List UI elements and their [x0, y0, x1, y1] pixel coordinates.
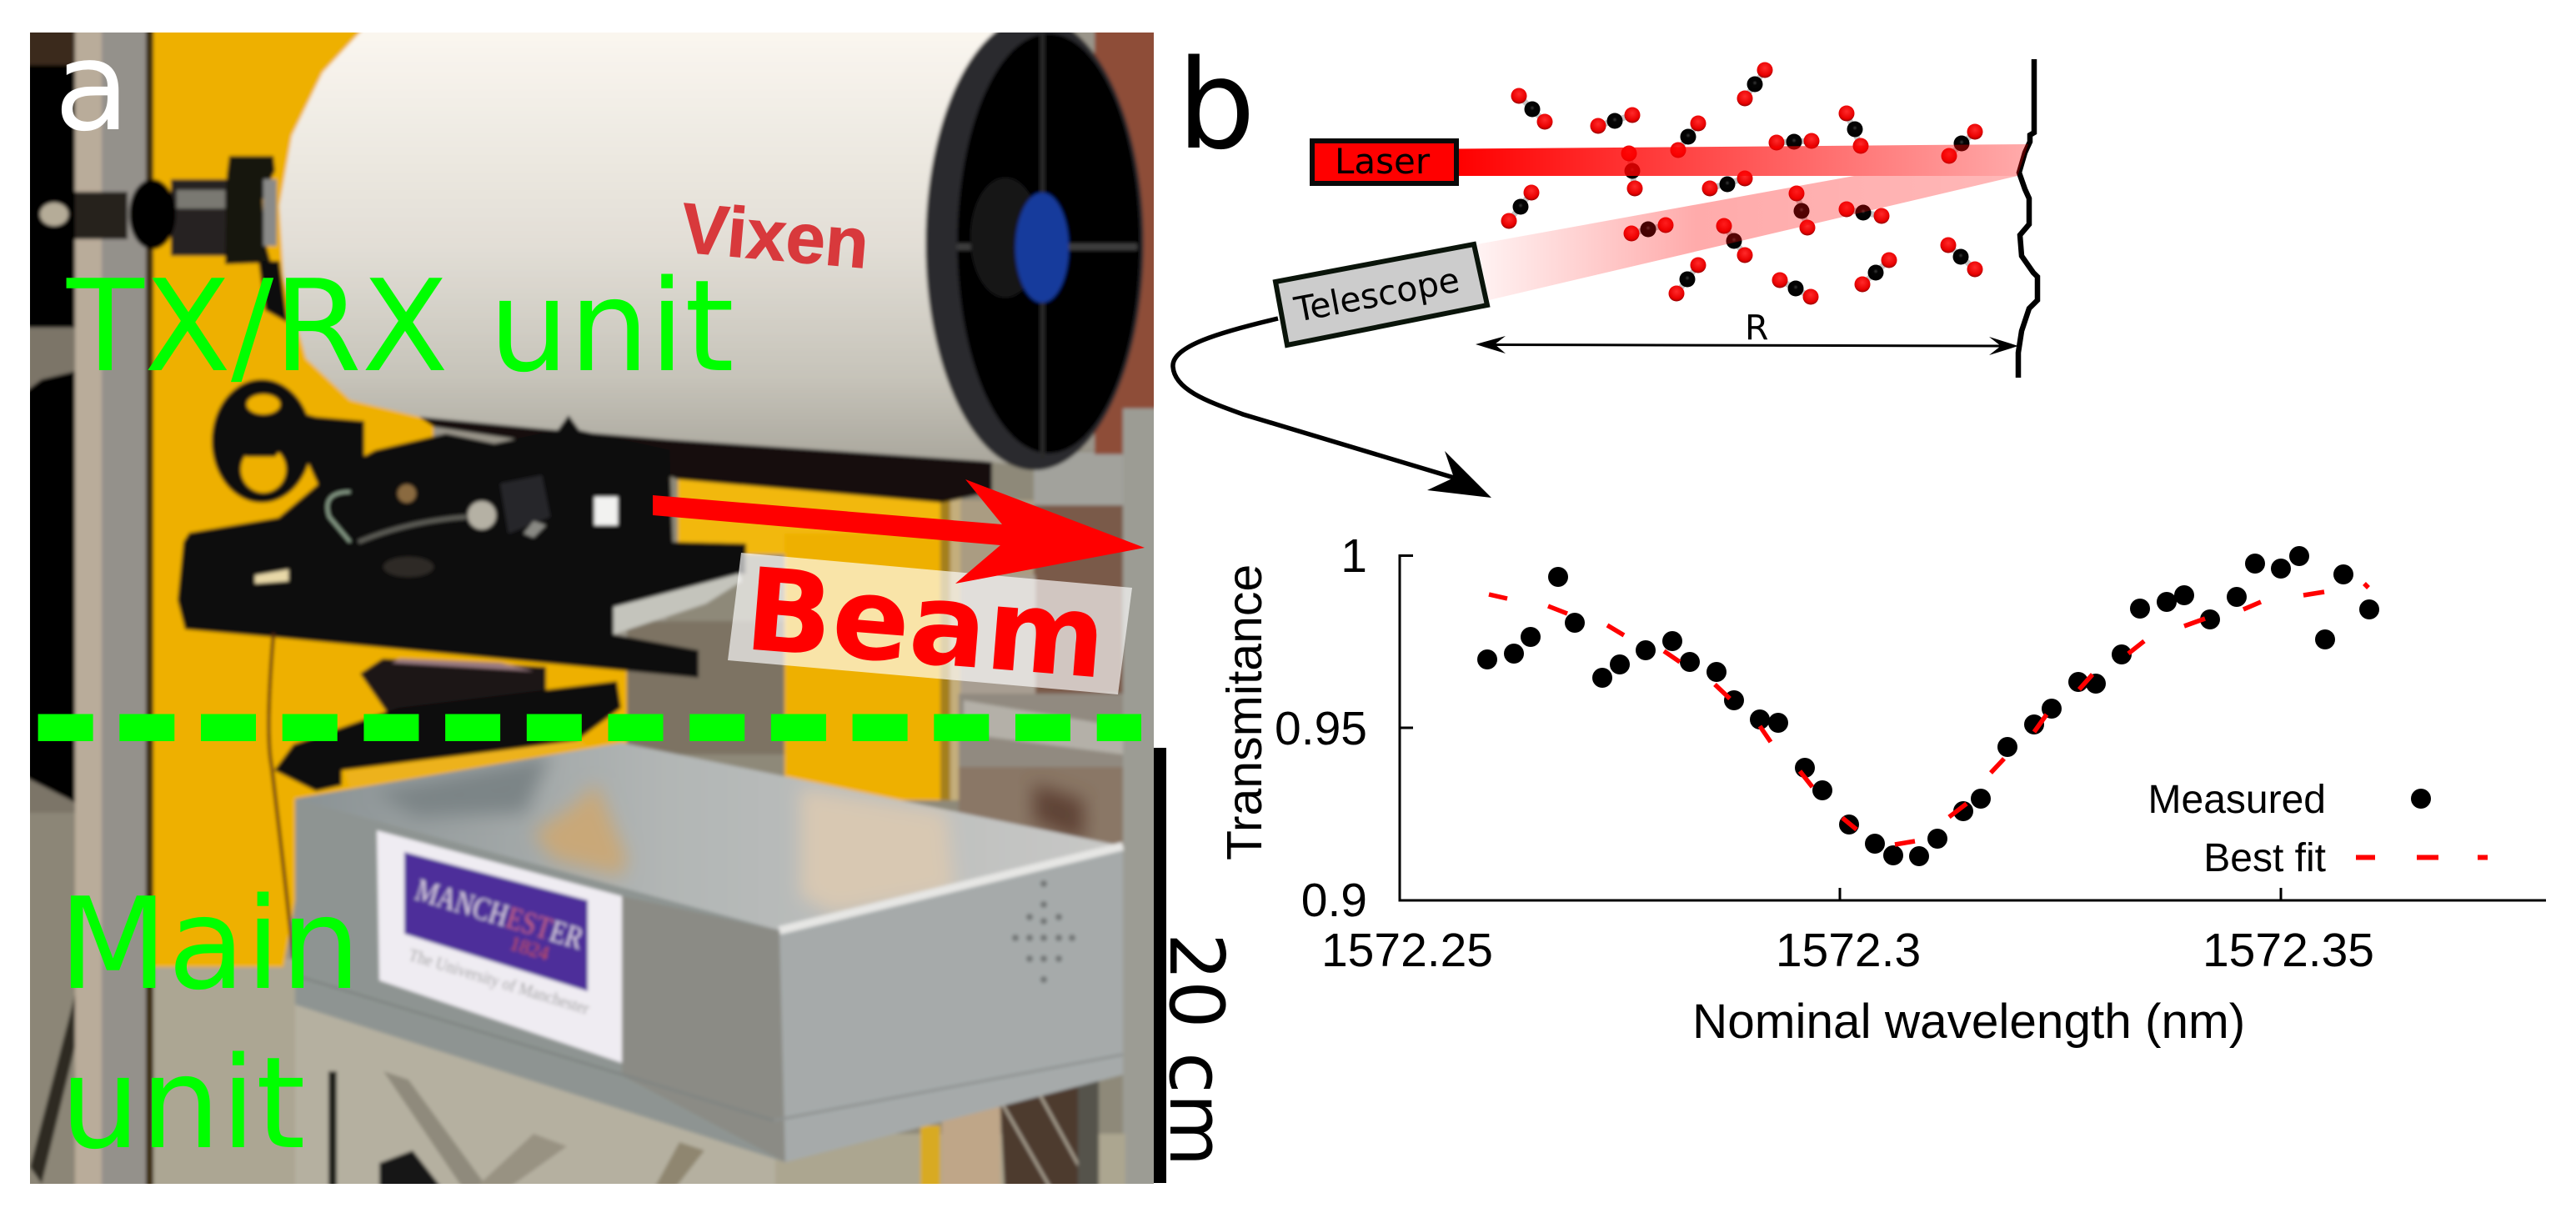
main box: [291, 741, 904, 799]
x tick labels: 1572.25: [1321, 924, 1493, 977]
icon: telescope box: [1275, 244, 1487, 345]
label: TX/RX unit: TX/RX unit: [66, 253, 734, 400]
tube and ring: [667, 439, 992, 503]
x tick labels: [1321, 924, 2374, 977]
y tick labels: 0.95: [1275, 702, 1367, 755]
laser beam: [1458, 144, 2028, 176]
diagram: laser remote sensing: [1173, 59, 2037, 498]
icon: laser box: [1312, 141, 1456, 183]
CO2 molecules: [1501, 62, 1982, 305]
y tick labels: 1: [1341, 529, 1367, 583]
target wall: [2018, 59, 2037, 378]
label: panel a: a: [54, 15, 130, 158]
x tick labels: 1572.3: [1776, 924, 1921, 977]
label: unit: unit: [60, 1030, 305, 1177]
legend: Best fit: [2203, 836, 2326, 880]
scale bar: 20 cm: [1152, 748, 1240, 1183]
axis title: x: Nominal wavelength (nm): [1692, 995, 2245, 1049]
best fit dashed curve: [1489, 584, 2368, 845]
panel a: photo of instrument: MANCHESTER: [411, 872, 588, 957]
chart axes: [1400, 555, 2546, 900]
icon: telescope box: Telescope: [1291, 259, 1463, 330]
legend: [2148, 778, 2488, 880]
optical bench: [178, 415, 746, 678]
y tick labels: 0.9: [1301, 874, 1367, 927]
x tick labels: 1572.35: [2203, 924, 2374, 977]
icon: laser box: Laser: [1335, 141, 1431, 182]
post and brackets: [360, 659, 546, 717]
curved arrow from telescope to chart: [1173, 318, 1491, 498]
table under box: [296, 1007, 777, 1184]
panel a: photo of instrument: 1824: [507, 933, 552, 965]
label: panel b: b: [1177, 33, 1255, 177]
panel a: photo of instrument: [25, 17, 1159, 1196]
label box: Beam: Beam: [740, 544, 1110, 705]
dashed separator between units: [38, 714, 1141, 741]
label: Main: Main: [58, 870, 361, 1018]
return beam to telescope: [1477, 176, 2017, 300]
axis title: y: Transmitance: [1217, 564, 1272, 860]
panel a: photo of instrument: The University of Manchester: [407, 945, 592, 1019]
legend: Measured: [2148, 778, 2326, 822]
scale bar: 20 cm: 20 cm: [1152, 933, 1240, 1166]
eyepiece: [75, 192, 128, 239]
y tick labels: [1275, 529, 1367, 927]
range arrow R: R: [1745, 308, 1769, 348]
wheel: [212, 379, 312, 503]
logo text: Vixen: Vixen: [678, 188, 872, 284]
range arrow R: [1476, 308, 2018, 355]
chart: transmittance vs wavelength: [1217, 529, 2546, 1049]
measured data points: [1477, 546, 2379, 866]
arrow: beam direction: [653, 479, 1145, 584]
right background: [667, 463, 1123, 1134]
